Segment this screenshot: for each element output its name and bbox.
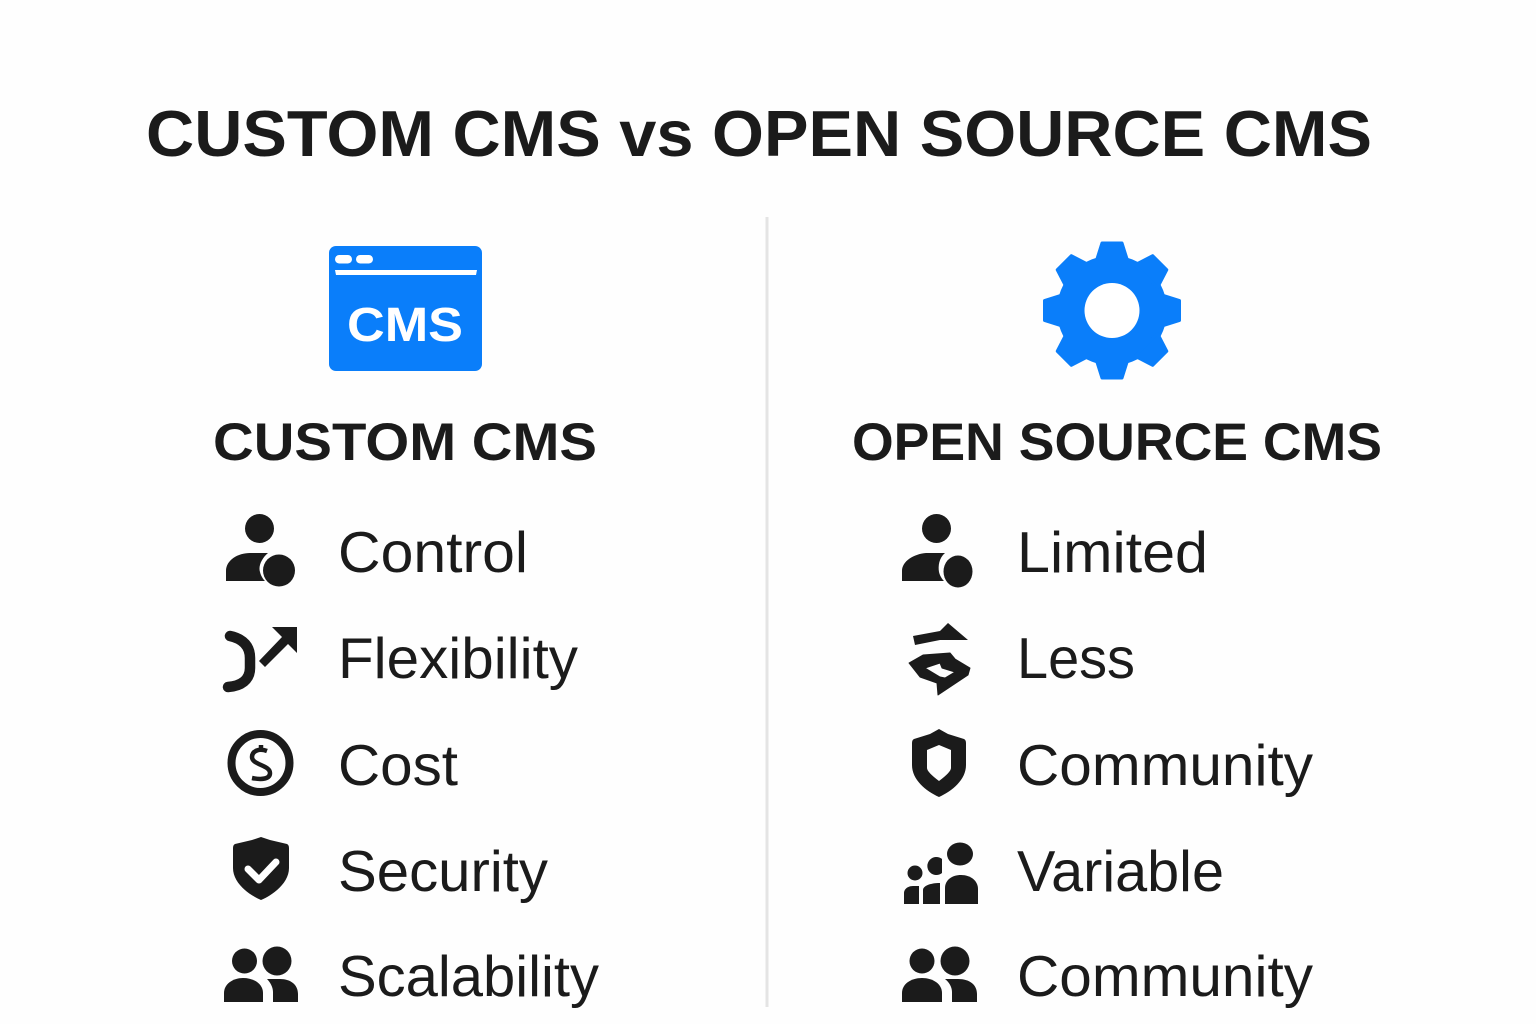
label: Security: Security — [338, 840, 548, 904]
icon: gear — [1044, 243, 1180, 378]
icon: person with circle — [902, 514, 972, 588]
panel: open source CMS — [852, 243, 1382, 1009]
icon: CMS browser window: CMS — [347, 299, 463, 352]
title: CUSTOM CMS vs OPEN SOURCE CMS — [146, 97, 1372, 170]
panel: custom CMS — [213, 246, 599, 1009]
row: Control — [226, 514, 528, 586]
label: Flexibility: Flexibility — [338, 627, 578, 691]
label: Control: Control — [338, 521, 528, 585]
row: Less — [909, 623, 1135, 695]
label: Variable: Variable — [1017, 840, 1224, 904]
row: Scalability — [224, 945, 599, 1009]
label: Community: Community — [1017, 734, 1313, 798]
icon: flexible curve and arrow — [228, 627, 297, 687]
icon: dollar coin — [232, 734, 290, 792]
row: Community 2 — [902, 945, 1313, 1009]
icon: twisted arrows — [909, 623, 970, 695]
row: Flexibility — [228, 627, 578, 691]
label: Scalability: Scalability — [338, 945, 599, 1009]
icon: two people — [224, 946, 298, 1002]
icon: CMS browser window — [329, 246, 482, 371]
icon: shield with check — [233, 837, 289, 900]
row: Variable — [904, 840, 1224, 904]
heading: open source CMS: OPEN SOURCE CMS — [852, 413, 1382, 472]
row: Security — [233, 837, 548, 904]
label: Community: Community — [1017, 945, 1313, 1009]
icon: two people — [902, 946, 977, 1002]
icon: growing people group — [904, 842, 978, 904]
label: Cost: Cost — [338, 734, 458, 798]
label: Limited: Limited — [1017, 521, 1208, 585]
row: Cost — [232, 734, 458, 798]
icon: person with circle — [226, 514, 295, 586]
label: Less: Less — [1017, 627, 1135, 691]
row: Community — [912, 729, 1313, 798]
icon: shield outline — [912, 729, 966, 797]
row: Limited — [902, 514, 1208, 588]
heading: custom CMS: CUSTOM CMS — [213, 413, 597, 472]
